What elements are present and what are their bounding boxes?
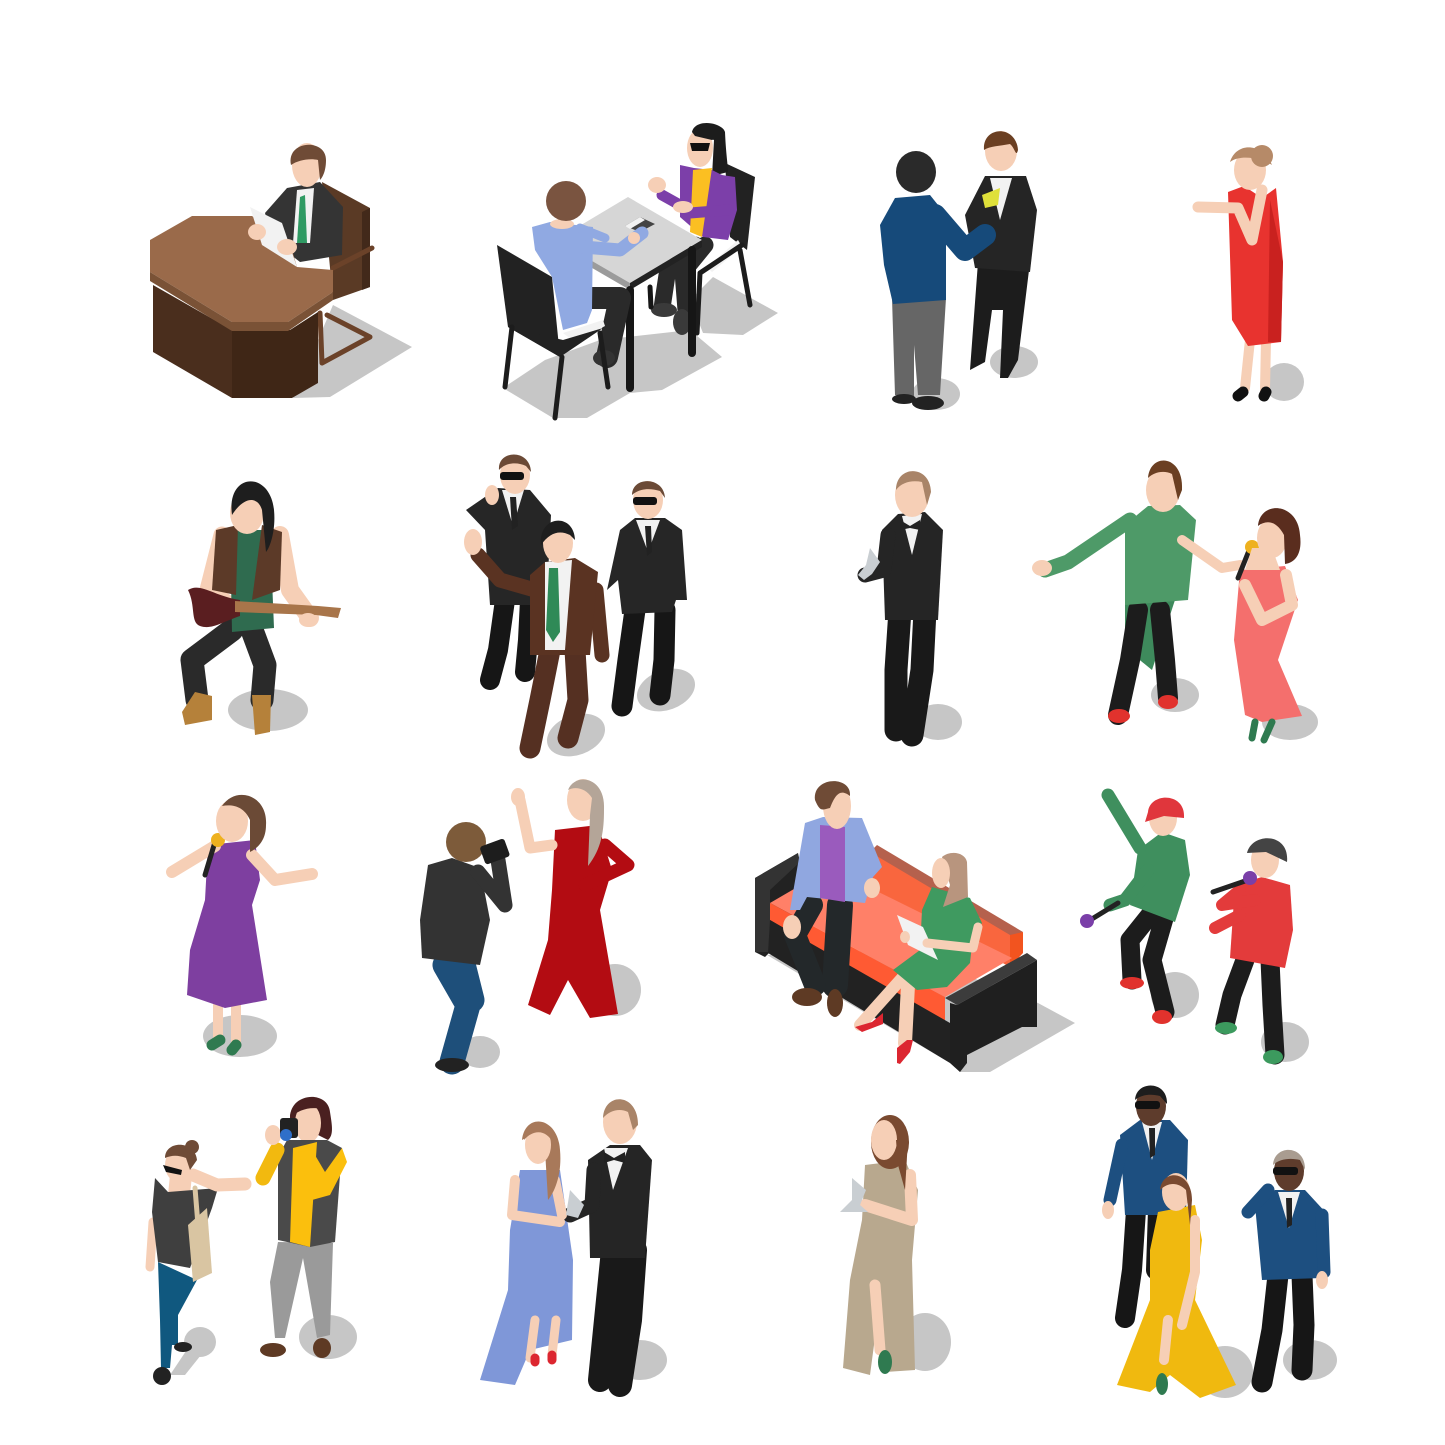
scene: woman in beige gown with trophy [840, 1115, 951, 1375]
scene: man in green and singer in coral gown [1032, 460, 1318, 740]
scene: reporter interviewing man in tuxedo [880, 131, 1038, 410]
scene: news anchor at desk [150, 143, 412, 398]
scene: woman in red dress [1198, 145, 1304, 401]
scene: singer in purple dress [172, 795, 312, 1057]
scene: paparazzi and woman with sunglasses [150, 1097, 357, 1385]
scene: award couple, blue gown and tuxedo [480, 1099, 667, 1385]
scene: guitarist [182, 481, 341, 735]
scene: celebrity with two bodyguards [464, 454, 701, 764]
scene: talk show couch [755, 781, 1075, 1072]
scene: photographer and woman in red gown [420, 779, 641, 1072]
scene: two rappers with microphones [1080, 795, 1309, 1064]
scene: man in tuxedo with trophy [858, 471, 962, 740]
scene: celebrity in yellow dress with two bodyguards [1102, 1085, 1337, 1398]
scene: interview at table [497, 123, 778, 418]
